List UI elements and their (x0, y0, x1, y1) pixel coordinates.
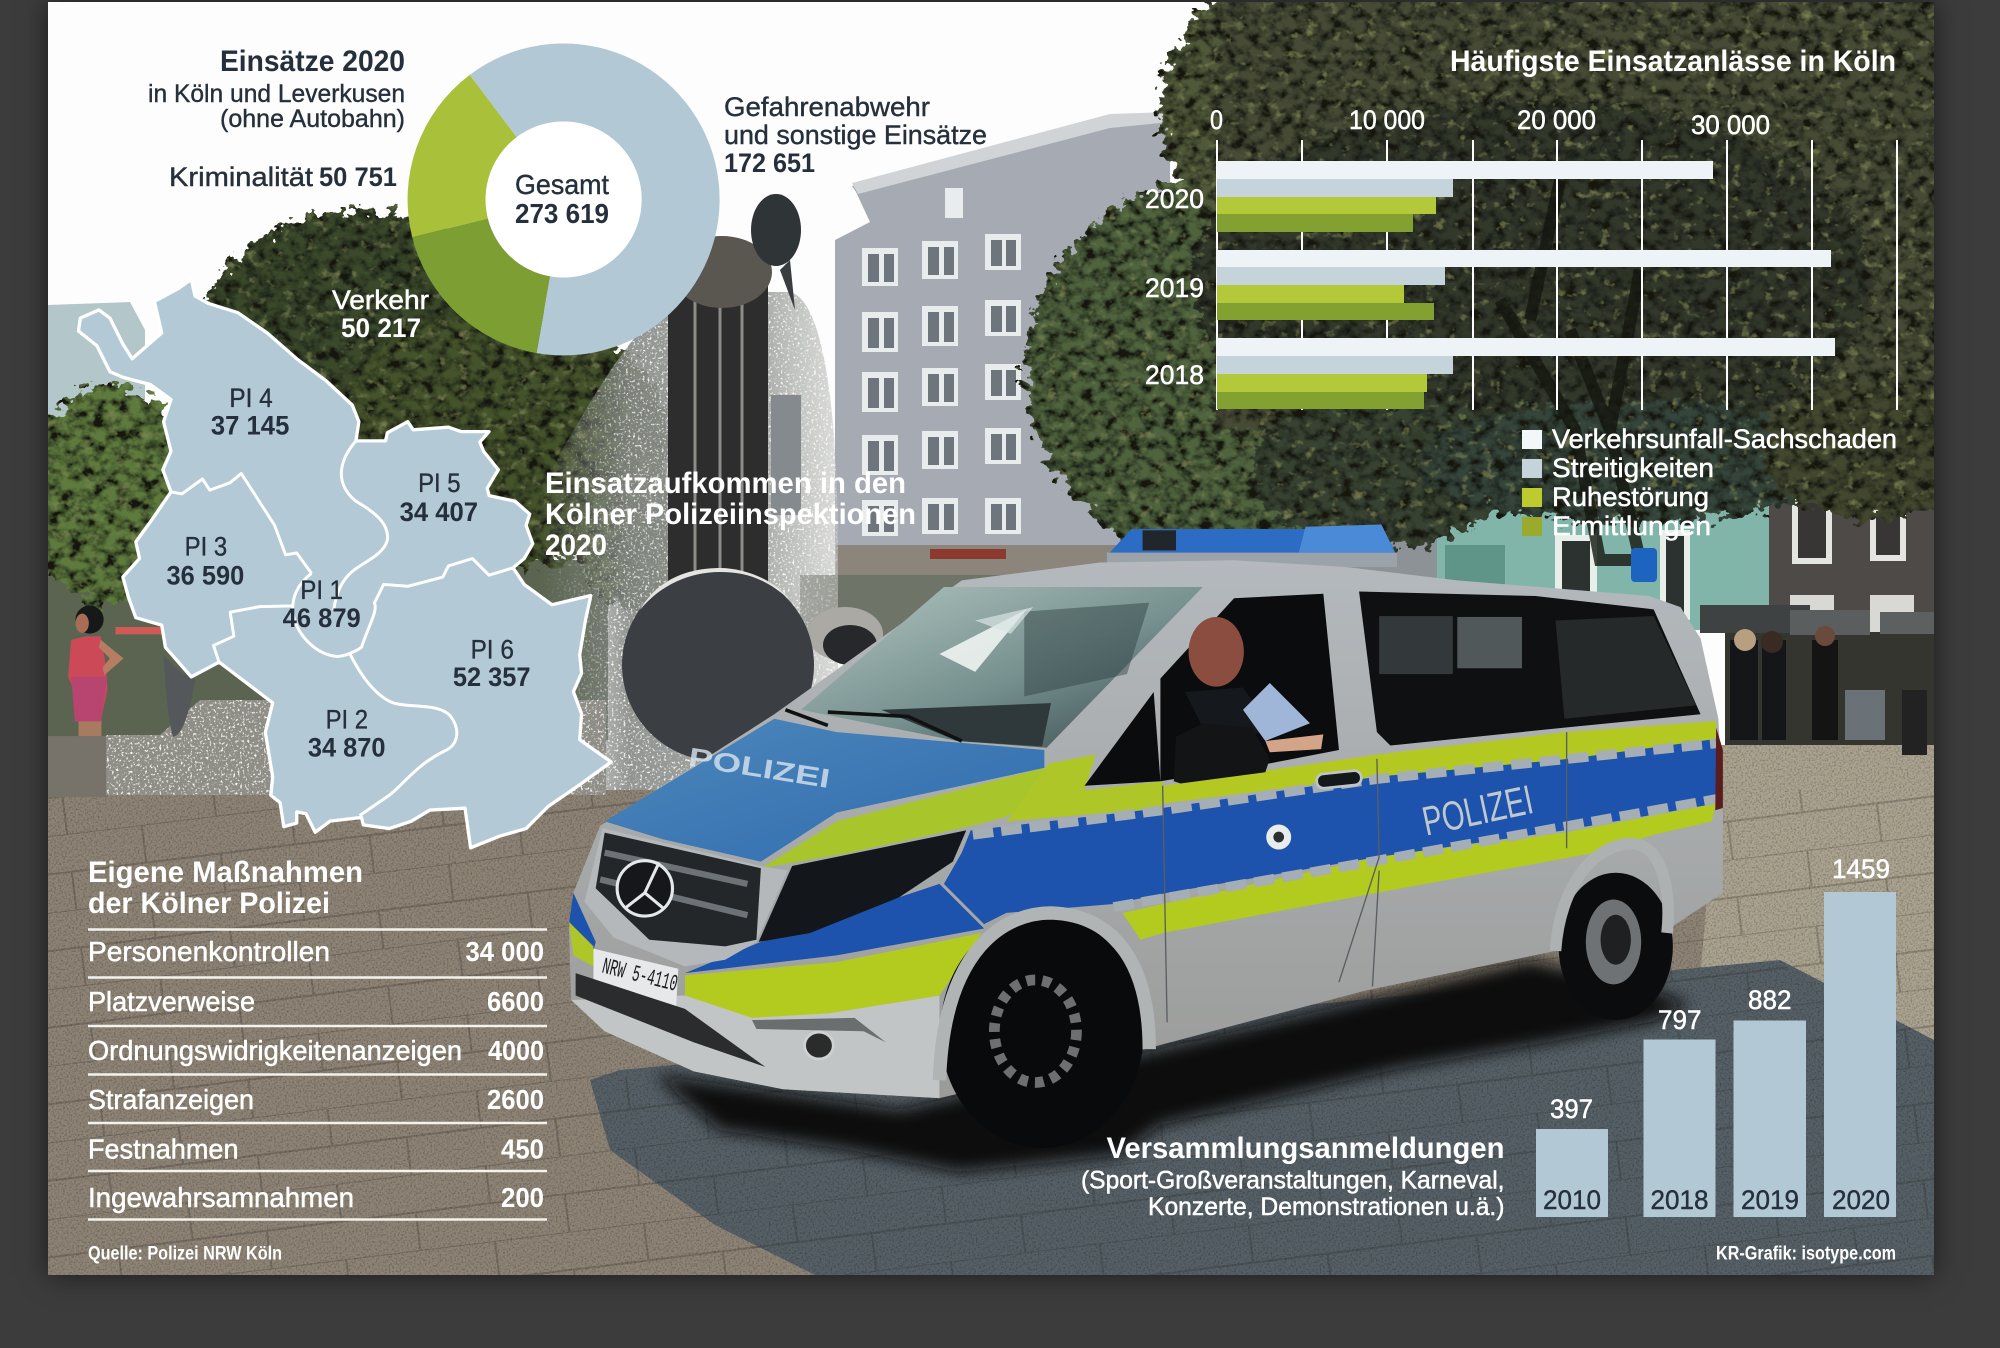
axis labels (1210, 105, 1770, 140)
label: Kriminalität: Kriminalität (169, 162, 314, 192)
axis labels: 0 (1210, 105, 1223, 135)
district labels: PI 4 (229, 383, 273, 413)
large stone sphere (622, 568, 883, 761)
label: Gefahrenabwehr: und sonstige Einsätze (724, 120, 987, 150)
bars 2019 (1217, 250, 1831, 320)
side lettering: POLIZEI (1418, 776, 1537, 844)
bar 2020: 2020 (1832, 1185, 1890, 1215)
bar 2019 (1734, 985, 1806, 1217)
district labels: PI 5 (418, 468, 461, 498)
district labels: PI 3 (185, 532, 227, 562)
table: Eigene Maßnahmen (88, 856, 547, 1220)
donut total (515, 169, 609, 229)
tree trunk and branches (1500, 180, 1640, 560)
year labels (1145, 184, 1204, 390)
grille and star (585, 828, 788, 966)
woman, stone and sculpture (45, 605, 195, 797)
donut chart: Einsätze 2020 (408, 43, 720, 355)
hood (605, 719, 1044, 862)
chart legend: Verkehrsunfall-Sachschaden (1552, 424, 1897, 454)
table rows: Platzverweise (88, 986, 255, 1017)
table rows: Ingewahrsamnahmen (88, 1182, 354, 1213)
donut heading: Einsätze 2020 (220, 45, 405, 78)
donut total: 273 619 (515, 198, 609, 229)
district labels: 36 590 (167, 560, 244, 590)
bar 2020: 1459 (1832, 854, 1890, 884)
hood yellow stripe (761, 768, 1044, 868)
year labels: 2020 (1145, 184, 1204, 214)
front blue and yellow (569, 884, 984, 1018)
side bands (944, 721, 1716, 940)
main grey building (800, 112, 1176, 645)
table rows: Strafanzeigen (88, 1084, 254, 1115)
table rows: Festnahmen (88, 1134, 238, 1164)
source credit: Quelle: Polizei NRW Köln (88, 1244, 282, 1264)
side mirror (1174, 723, 1270, 783)
windshield (785, 587, 1203, 748)
bars 2020 (1217, 161, 1713, 232)
backdrop behind woman (48, 560, 608, 740)
number plate: NRW 5-4110 (599, 954, 680, 998)
left distant building (48, 302, 145, 418)
bar 2020 (1824, 854, 1896, 1217)
donut heading: in Köln und Leverkusen (148, 80, 405, 108)
van body silhouette (569, 560, 1723, 1098)
rear side window (1359, 592, 1701, 746)
axis labels: 20 000 (1517, 105, 1596, 135)
table rows: 450 (501, 1134, 544, 1164)
bars 2018 (1217, 338, 1835, 409)
table rows: 200 (501, 1182, 544, 1213)
map heading: Kölner Polizeiinspektionen (545, 498, 916, 531)
table rows: 6600 (487, 986, 544, 1017)
bar chart: Häufigste Einsatzanlässe (1145, 45, 1897, 410)
donut heading (148, 45, 405, 133)
year labels: 2019 (1145, 273, 1204, 303)
label: Gefahrenabwehr: Gefahrenabwehr (724, 92, 930, 122)
rear wheel (1555, 844, 1673, 1020)
segment: Kriminalität (408, 75, 517, 237)
chart legend: Ermittlungen (1552, 511, 1711, 541)
district borders (171, 441, 513, 816)
label: Verkehr: 50 217 (341, 313, 421, 343)
fountain column (668, 194, 801, 595)
table rows: 2600 (487, 1084, 544, 1115)
bar 2018: 797 (1658, 1005, 1702, 1035)
map heading: 2020 (545, 529, 607, 562)
table rows (88, 936, 544, 1213)
table heading: Eigene Maßnahmen (88, 856, 363, 889)
headlight (759, 830, 966, 942)
chart heading: Konzerte, Demonstrationen u.ä.) (1148, 1193, 1504, 1221)
table rows: Personenkontrollen (88, 936, 330, 967)
chart title: Häufigste Einsatzanlässe in Köln (1450, 45, 1896, 78)
tail light (1715, 728, 1723, 810)
teal and brown houses behind van (1346, 498, 1934, 632)
segment: Gefahrenabwehr (470, 43, 720, 355)
year labels: 2018 (1145, 360, 1204, 390)
bar 2018 (1644, 1005, 1716, 1217)
big tree right (1025, 0, 1980, 565)
label: Kriminalität (169, 162, 397, 192)
label: Verkehr: Verkehr (332, 285, 429, 315)
table rows: 4000 (488, 1035, 544, 1066)
label: Kriminalität: 50 751 (319, 162, 397, 192)
lower grille and fog lamp (576, 973, 886, 1067)
map of Cologne police inspections (78, 279, 611, 848)
axis labels: 30 000 (1691, 110, 1770, 140)
chart legend: Streitigkeiten (1552, 453, 1714, 483)
table rows: Ordnungswidrigkeitenanzeigen (88, 1035, 462, 1066)
bar 2019: 2019 (1741, 1185, 1799, 1215)
table heading (88, 856, 363, 920)
district labels: 34 407 (400, 497, 478, 527)
front wheel (939, 913, 1149, 1148)
door lines (1163, 732, 1567, 1022)
graphic credit: KR-Grafik: isotype.com (1716, 1244, 1896, 1264)
bar 2018: 2018 (1650, 1185, 1708, 1215)
segment: Verkehr (412, 218, 550, 353)
bar 2019: 882 (1748, 985, 1792, 1015)
table rows: 34 000 (466, 936, 544, 967)
bar chart: Versammlungsanmeldungen (1081, 854, 1896, 1221)
number plate (593, 949, 680, 1009)
left dark tree (25, 210, 700, 610)
district labels: PI 1 (300, 575, 343, 605)
district labels: 52 357 (453, 662, 531, 692)
label: Gefahrenabwehr (724, 92, 987, 178)
chart heading: Versammlungsanmeldungen (1106, 1132, 1504, 1165)
water spray (540, 292, 838, 800)
table heading: der Kölner Polizei (88, 887, 330, 920)
bar 2010: 397 (1550, 1094, 1593, 1124)
police van (569, 525, 1723, 1148)
hood lettering: POLIZEI (686, 742, 832, 794)
police star badge (1266, 825, 1291, 850)
donut total: Gesamt (515, 169, 609, 200)
district labels: 34 870 (308, 732, 386, 762)
label: Verkehr (332, 285, 429, 343)
district labels: PI 2 (326, 705, 368, 735)
people and cars in background right (1631, 548, 1934, 755)
bar 2010 (1536, 1094, 1608, 1217)
chart heading: (Sport-Großveranstaltungen, Karneval, (1081, 1166, 1504, 1194)
donut centre (486, 122, 642, 278)
pavement (48, 740, 1934, 1280)
chart heading (1081, 1132, 1504, 1221)
chart legend (1522, 424, 1897, 541)
district labels: PI 6 (471, 634, 514, 664)
donut heading: (ohne Autobahn) (220, 105, 405, 133)
map heading (545, 467, 916, 562)
door handle (1316, 770, 1362, 789)
district labels: 37 145 (211, 411, 290, 441)
map outline (78, 279, 611, 848)
label: Gefahrenabwehr: 172 651 (724, 148, 815, 178)
driver window and driver (1085, 594, 1339, 786)
district labels (167, 383, 531, 762)
lower bumper highlight (571, 996, 939, 1098)
ground shadow of van (590, 960, 1934, 1280)
bar 2010: 2010 (1543, 1185, 1601, 1215)
axis labels: 10 000 (1349, 105, 1425, 135)
district labels: 46 879 (283, 603, 361, 633)
chart legend: Ruhestörung (1552, 482, 1709, 512)
map heading: Einsatzaufkommen in den (545, 467, 906, 500)
light bar (1107, 525, 1397, 567)
water basin at left (106, 700, 606, 795)
